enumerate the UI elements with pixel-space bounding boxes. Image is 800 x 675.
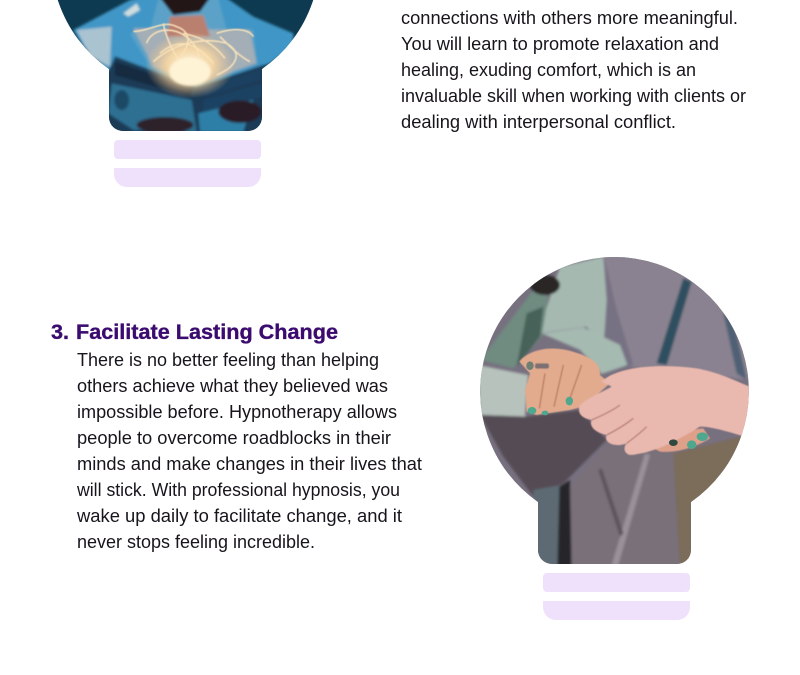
text block: top right paragraph: healing, exuding comfort, which is an bbox=[401, 59, 696, 80]
lightbulb base bar 1 bbox=[543, 573, 690, 592]
text block: section 3 paragraph: others achieve what they believed was bbox=[77, 375, 388, 396]
text block: top right paragraph: connections with others more meaningful. bbox=[401, 7, 738, 28]
panel: bottom lightbulb photo bbox=[470, 250, 760, 620]
text block: top right paragraph bbox=[401, 7, 746, 132]
lightbulb base bar 1 bbox=[114, 140, 261, 159]
text block: top right paragraph: dealing with interpersonal conflict. bbox=[401, 111, 676, 132]
text block: top right paragraph: invaluable skill when working with clients or bbox=[401, 85, 746, 106]
text block: section 3 paragraph: will stick. With professional hypnosis, you bbox=[76, 479, 400, 500]
text block: section 3 paragraph: minds and make changes in their lives that bbox=[77, 453, 422, 474]
lightbulb base bar 2 bbox=[543, 601, 690, 620]
photo: man reading a glowing book bbox=[58, 0, 314, 131]
heading: 3. Facilitate Lasting Change: Facilitate Lasting Change bbox=[76, 321, 338, 344]
text block: top right paragraph: You will learn to promote relaxation and bbox=[401, 33, 719, 54]
heading: 3. Facilitate Lasting Change: 3. bbox=[51, 321, 69, 344]
text block: section 3 paragraph bbox=[76, 349, 422, 552]
text block: section 3 paragraph: impossible before. Hypnotherapy allows bbox=[77, 401, 397, 422]
lightbulb base bar 2 bbox=[114, 168, 261, 187]
photo: two people holding hands bbox=[480, 257, 749, 564]
text block: section 3 paragraph: people to overcome roadblocks in their bbox=[77, 427, 391, 448]
panel: top lightbulb photo bbox=[58, 0, 314, 187]
text block: section 3 paragraph: never stops feeling incredible. bbox=[77, 531, 315, 552]
text block: section 3 paragraph: There is no better feeling than helping bbox=[77, 349, 379, 370]
text block: section 3 paragraph: wake up daily to facilitate change, and it bbox=[76, 505, 402, 526]
